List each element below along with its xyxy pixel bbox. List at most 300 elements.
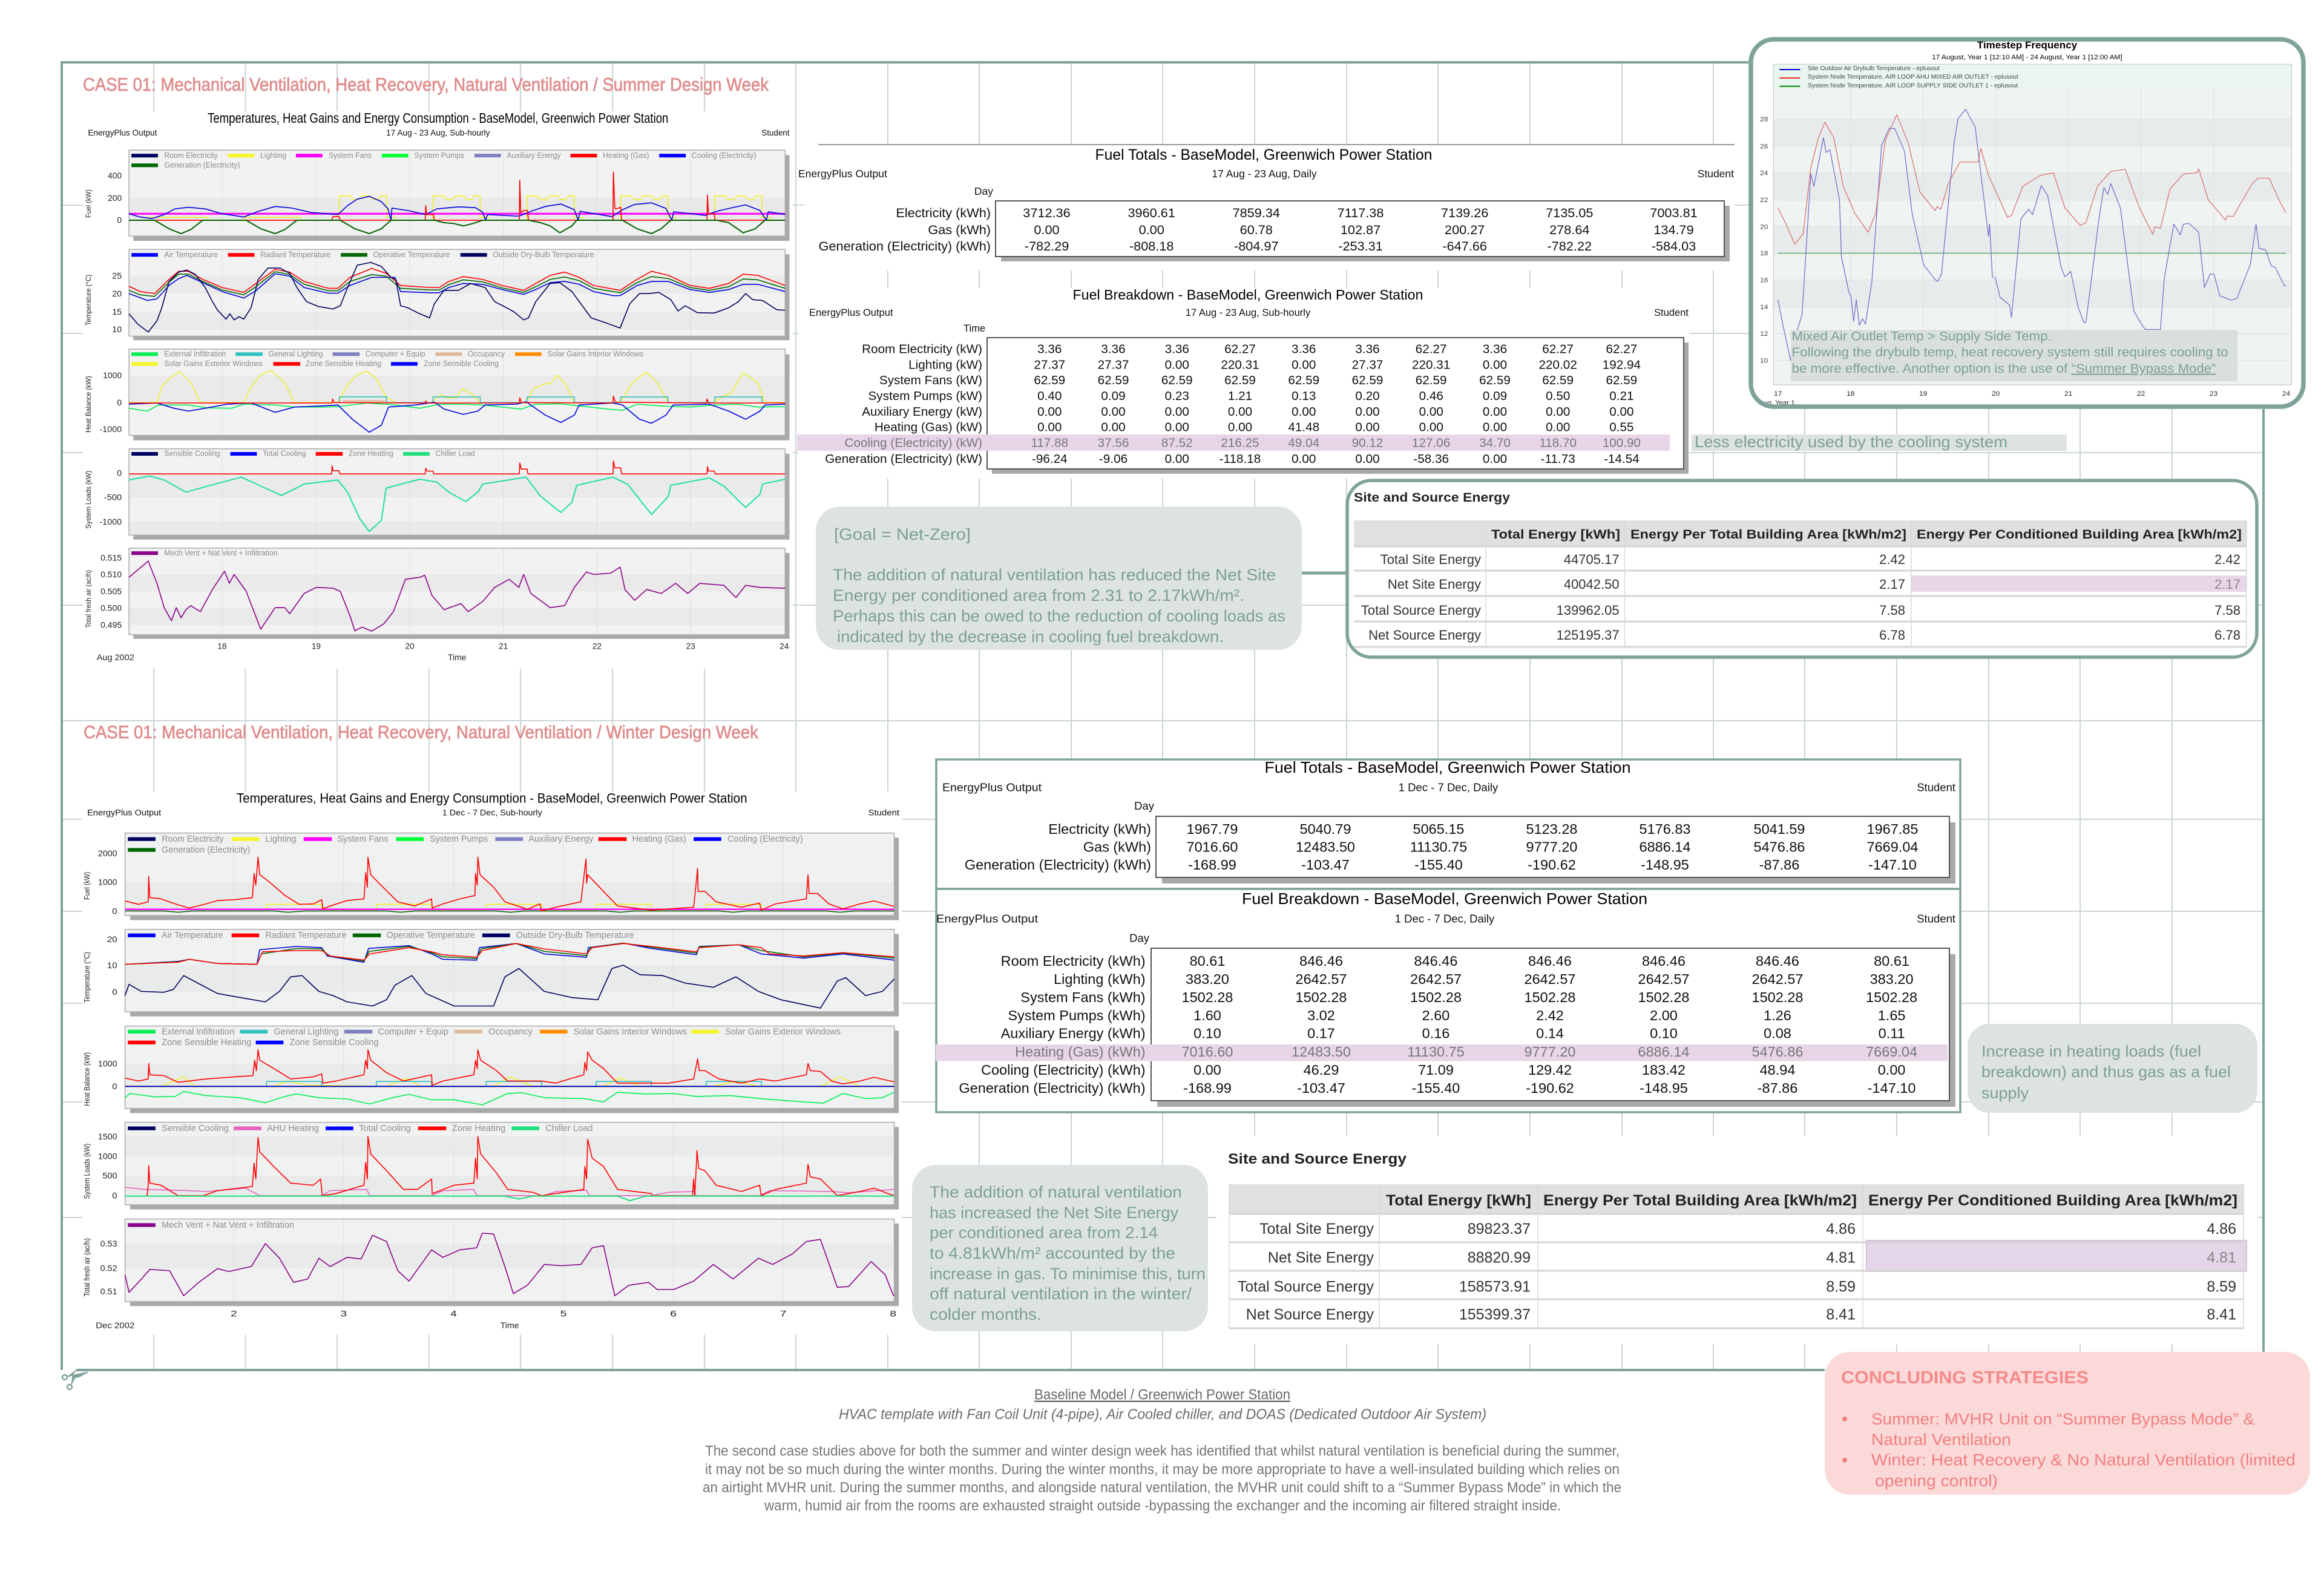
table: summer fuel breakdown: 0.23 <box>1165 389 1189 403</box>
axis labels: 1000 <box>98 877 117 887</box>
table: winter fuel breakdown: 846.46 <box>1414 953 1457 969</box>
text block: case study summary: it may not be so much during the winter months. During the winter months, it may be more appropriate to have a well-insulated building which relies on <box>705 1461 1620 1478</box>
table: summer fuel breakdown: -11.73 <box>1541 452 1575 466</box>
table: summer fuel breakdown: 0.21 <box>1609 389 1634 403</box>
table: summer fuel breakdown: 3.36 <box>1292 342 1316 356</box>
axis labels: 1000 <box>103 371 122 381</box>
table: winter fuel breakdown: 3.02 <box>1307 1008 1335 1023</box>
table: winter fuel breakdown: -190.62 <box>1526 1080 1574 1096</box>
callout: concluding strategies <box>1825 1352 2310 1495</box>
table: winter fuel breakdown: -147.10 <box>1868 1080 1915 1096</box>
panel: temperature: Air Temperature <box>162 930 223 940</box>
table: summer fuel breakdown: 0.00 <box>1165 452 1189 466</box>
panel: temperature: Air Temperature <box>164 250 218 259</box>
table: winter fuel breakdown: 846.46 <box>1528 953 1572 969</box>
table: winter fuel breakdown: 1.60 <box>1193 1008 1221 1023</box>
panel: temperature <box>125 929 899 1017</box>
table: summer site and source energy: Net Site Energy <box>1388 577 1481 592</box>
table: summer fuel breakdown: 34.70 <box>1479 436 1511 450</box>
table: summer fuel breakdown: 0.00 <box>1609 405 1634 419</box>
table: summer fuel breakdown: 0.00 <box>1355 421 1380 434</box>
chart meta labels: EnergyPlus Output <box>88 128 157 138</box>
axis labels: 0.500 <box>100 604 122 613</box>
table: summer fuel totals <box>798 145 1735 270</box>
table: winter fuel breakdown: System Fans (kWh) <box>1020 989 1146 1005</box>
text block: case study summary: The second case studies above for both the summer and winter design week has identified that whilst natural ventilation is beneficial during the summer, <box>705 1443 1620 1460</box>
axis labels: System Loads (kW) <box>85 471 93 529</box>
table: summer fuel breakdown: 3.36 <box>1165 342 1189 356</box>
axis labels: 14 <box>1760 303 1768 310</box>
table: summer fuel breakdown: 62.27 <box>1224 342 1256 356</box>
axis labels: 20 <box>1992 390 2000 398</box>
table: winter fuel breakdown: 71.09 <box>1418 1062 1454 1078</box>
table: summer fuel breakdown: 0.00 <box>1483 405 1507 419</box>
table: summer fuel breakdown: Lighting (kW) <box>908 358 982 372</box>
table: winter fuel breakdown: 80.61 <box>1874 953 1909 969</box>
axis labels: 18 <box>1846 390 1854 398</box>
axis labels: 25 <box>112 272 122 281</box>
axis labels: 22 <box>2137 390 2145 398</box>
table: summer fuel breakdown: 0.09 <box>1101 389 1126 403</box>
table: winter fuel totals: -155.40 <box>1414 857 1463 873</box>
table: summer fuel breakdown: Heating (Gas) (kW) <box>875 421 982 434</box>
panel: system loads: AHU Heating <box>267 1123 319 1133</box>
table: summer fuel breakdown: Time <box>963 323 985 334</box>
plot area: System Node Temperature, AIR LOOP AHU MIXED AIR OUTLET - eplusout <box>1808 73 2018 80</box>
table: summer fuel breakdown: 62.27 <box>1542 342 1574 356</box>
table: summer fuel breakdown: 0.00 <box>1292 452 1316 466</box>
table: winter site and source energy: 4.81 <box>1826 1249 1856 1266</box>
table: summer fuel totals: -808.18 <box>1129 238 1173 254</box>
table: summer fuel breakdown: 62.59 <box>1098 373 1129 387</box>
table: winter fuel breakdown: 1502.28 <box>1296 989 1347 1005</box>
axis labels: Aug, Year 1 <box>1759 399 1795 406</box>
table: winter fuel breakdown: System Pumps (kWh) <box>1008 1008 1146 1023</box>
table: summer fuel breakdown: 0.00 <box>1037 405 1062 419</box>
callout: less electricity: Less electricity used by the cooling system <box>1695 433 2007 451</box>
table: summer fuel breakdown: 41.48 <box>1288 421 1319 434</box>
table: winter fuel breakdown: 6886.14 <box>1638 1044 1689 1060</box>
table: winter fuel breakdown: Auxiliary Energy (kWh) <box>1001 1025 1146 1041</box>
page frame <box>62 62 2263 1370</box>
panel: temperature: Radiant Temperature <box>260 250 331 259</box>
table: winter fuel totals: 7669.04 <box>1867 839 1918 854</box>
table: summer site and source energy: 2.17 <box>1879 577 1905 592</box>
table: winter fuel totals: 5065.15 <box>1413 821 1464 837</box>
table: winter fuel breakdown: 2642.57 <box>1410 971 1462 987</box>
table: summer fuel totals: 278.64 <box>1549 222 1589 237</box>
table: summer fuel totals: -782.29 <box>1025 238 1069 254</box>
table: winter fuel breakdown: Generation (Electricity) (kWh) <box>959 1080 1146 1096</box>
chart meta labels: EnergyPlus Output <box>87 808 162 818</box>
table: winter site and source energy: Energy Per Conditioned Building Area [kWh/m2] <box>1868 1192 2237 1209</box>
table: summer fuel breakdown: 0.00 <box>1355 405 1380 419</box>
callout: mixed air outlet note: be more effective. Another option is the use of <box>1791 362 2068 376</box>
plot area: System Node Temperature, AIR LOOP SUPPLY SIDE OUTLET 1 - eplusout <box>1808 82 2018 89</box>
axis labels: 19 <box>312 642 321 651</box>
axis labels <box>85 171 789 663</box>
text block: case study summary <box>703 1443 1621 1514</box>
table: summer fuel breakdown: 1.21 <box>1228 389 1252 403</box>
table: summer fuel breakdown: 0.00 <box>1292 358 1316 372</box>
table: summer fuel breakdown: -96.24 <box>1032 452 1068 466</box>
table: winter fuel breakdown: 9777.20 <box>1525 1044 1575 1060</box>
table: summer fuel breakdown: 37.56 <box>1098 436 1129 450</box>
table: summer fuel breakdown: 0.50 <box>1546 389 1570 403</box>
table: winter fuel totals: Gas (kWh) <box>1083 839 1151 854</box>
axis labels: -1000 <box>100 425 122 434</box>
panel: heat balance <box>129 349 789 441</box>
axis labels: 21 <box>499 642 508 651</box>
table: summer fuel totals: 102.87 <box>1341 222 1380 237</box>
panel: fuel: Cooling (Electricity) <box>727 834 803 844</box>
axis labels: Fuel (kW) <box>85 189 93 218</box>
chart: summer temperatures, heat gains and energy consumption <box>83 111 793 669</box>
table: summer fuel totals: 134.79 <box>1653 222 1694 237</box>
table: winter fuel breakdown: 846.46 <box>1756 953 1799 969</box>
panel: heat balance: Computer + Equip <box>378 1026 448 1037</box>
panel: heat balance: Occupancy <box>468 349 505 358</box>
axis labels: 20 <box>112 289 122 298</box>
table: winter fuel breakdown: 0.14 <box>1536 1025 1564 1041</box>
table: winter fuel totals: 5123.28 <box>1526 821 1577 837</box>
table: summer fuel totals: 7135.05 <box>1546 205 1594 220</box>
table: winter site and source energy: 8.41 <box>1826 1306 1856 1323</box>
table: summer fuel breakdown: 0.55 <box>1609 421 1634 434</box>
panel: fuel: Lighting <box>260 151 286 160</box>
table: summer fuel breakdown: 0.00 <box>1228 405 1252 419</box>
axis labels: 21 <box>2064 390 2072 398</box>
table: summer fuel breakdown: 62.59 <box>1479 373 1511 387</box>
chart: timestep frequency panel <box>1751 39 2303 407</box>
table: summer fuel totals: Electricity (kWh) <box>896 205 991 220</box>
table: summer fuel breakdown: 0.00 <box>1165 358 1189 372</box>
axis labels: Temperature (°C) <box>84 952 91 1003</box>
axis labels: 200 <box>108 194 122 203</box>
table: winter site and source energy: Site and Source Energy <box>1228 1151 1407 1167</box>
table: winter fuel breakdown: 129.42 <box>1528 1062 1572 1078</box>
table: summer fuel breakdown: 87.52 <box>1161 436 1193 450</box>
table: summer fuel breakdown: System Pumps (kW) <box>868 389 982 403</box>
divider line above fuel totals <box>818 144 1735 145</box>
table: summer fuel breakdown: 62.59 <box>1288 373 1319 387</box>
panel: fuel <box>125 833 899 920</box>
text block: project caption: Baseline Model / Greenwich Power Station <box>1034 1387 1290 1403</box>
callout: winter natural ventilation note: to 4.81kWh/m² accounted by the <box>930 1244 1175 1262</box>
callout: mixed air outlet note <box>1791 329 2237 381</box>
table: winter fuel breakdown: 0.17 <box>1307 1025 1335 1041</box>
table: summer fuel breakdown: 0.46 <box>1419 389 1443 403</box>
table: winter fuel breakdown: Lighting (kWh) <box>1054 971 1146 987</box>
axis labels: Total fresh air (ac/h) <box>84 1238 91 1297</box>
table: summer fuel breakdown: 220.02 <box>1539 358 1577 372</box>
table: winter fuel breakdown: 12483.50 <box>1292 1044 1351 1060</box>
table: winter fuel totals: 12483.50 <box>1296 839 1355 854</box>
table: winter fuel totals: 5176.83 <box>1640 821 1690 837</box>
table: summer fuel totals: 7859.34 <box>1233 205 1280 220</box>
table: summer site and source energy: 2.42 <box>1879 552 1905 567</box>
table: winter fuel breakdown: Cooling (Electricity) (kWh) <box>981 1062 1146 1078</box>
table: summer site and source energy: 2.42 <box>2214 552 2240 567</box>
connector: goal note to site table <box>1302 571 1346 575</box>
table: summer fuel breakdown: 3.36 <box>1037 342 1062 356</box>
table: winter fuel breakdown: 1.26 <box>1764 1008 1791 1023</box>
panel: heat balance: Solar Gains Interior Windows <box>547 349 643 358</box>
table: winter site and source energy: Total Energy [kWh] <box>1386 1192 1531 1209</box>
axis labels: 1500 <box>98 1132 117 1141</box>
axis labels: 18 <box>1760 249 1768 257</box>
chart meta labels: Student <box>868 808 899 818</box>
panel: heat balance: Zone Sensible Cooling <box>424 359 499 368</box>
table: summer site and source energy: Site and Source Energy <box>1354 491 1510 505</box>
table: winter fuel totals <box>936 758 1960 889</box>
panel: fuel: Heating (Gas) <box>603 151 649 160</box>
axis labels <box>84 849 896 1330</box>
table: winter fuel breakdown: 5476.86 <box>1752 1044 1803 1060</box>
panel: temperature: Operative Temperature <box>373 250 450 259</box>
axis labels: 0.53 <box>100 1239 117 1248</box>
axis labels: -1000 <box>100 517 122 527</box>
table: summer fuel totals: 0.00 <box>1034 222 1060 237</box>
table: winter fuel breakdown: -103.47 <box>1297 1080 1345 1096</box>
callout: concluding strategies: CONCLUDING STRATEGIES <box>1841 1368 2089 1388</box>
table: winter fuel breakdown: Heating (Gas) (kWh) <box>1015 1044 1146 1060</box>
axis labels: 0 <box>117 398 122 408</box>
chart meta labels: Student <box>761 128 790 138</box>
table: summer fuel breakdown: -9.06 <box>1099 452 1128 466</box>
table: winter site and source energy: 8.41 <box>2207 1306 2236 1323</box>
panel: heat balance: External Infiltration <box>162 1026 234 1037</box>
table: summer fuel totals: EnergyPlus Output <box>798 168 887 180</box>
table: winter fuel breakdown: 2642.57 <box>1296 971 1347 987</box>
axis labels: 0 <box>112 1082 117 1092</box>
table: winter fuel breakdown: 0.10 <box>1193 1025 1221 1041</box>
table: summer fuel totals: Fuel Totals - BaseModel, Greenwich Power Station <box>1095 146 1432 163</box>
table: summer fuel breakdown <box>797 287 1689 479</box>
table: winter fuel totals: EnergyPlus Output <box>942 781 1042 794</box>
table: summer site and source energy: 125195.37 <box>1557 628 1620 643</box>
table: winter fuel breakdown: -168.99 <box>1183 1080 1232 1096</box>
chart title: Temperatures, Heat Gains and Energy Consumption - BaseModel, Greenwich Power Station <box>237 790 747 805</box>
axis labels: 0.515 <box>100 554 122 563</box>
table: winter fuel totals: 7016.60 <box>1187 839 1238 854</box>
table: winter site and source energy: Total Site Energy <box>1259 1221 1374 1237</box>
chart: winter temperatures, heat gains and energy consumption <box>82 790 902 1335</box>
table: summer fuel breakdown: -118.18 <box>1219 452 1261 466</box>
table: summer fuel breakdown: 0.00 <box>1292 405 1316 419</box>
table: summer fuel breakdown: 0.00 <box>1101 405 1126 419</box>
table: summer fuel breakdown: 62.59 <box>1034 373 1065 387</box>
callout: winter natural ventilation note: increase in gas. To minimise this, turn <box>930 1265 1206 1283</box>
table: winter fuel breakdown: 0.16 <box>1422 1025 1449 1041</box>
panel: system loads: Total Cooling <box>359 1123 411 1133</box>
table: winter fuel totals: -148.95 <box>1641 857 1689 873</box>
callout: mixed air outlet note: Mixed Air Outlet Temp > Supply Side Temp. <box>1791 329 2052 343</box>
panel: heat balance: General Lighting <box>274 1026 339 1037</box>
axis labels: 10 <box>107 960 117 970</box>
table: summer fuel breakdown: 220.31 <box>1412 358 1450 372</box>
panel: fuel: System Pumps <box>414 151 464 160</box>
table: summer fuel totals: Student <box>1698 168 1734 180</box>
panel: total fresh air: Mech Vent + Nat Vent + Infiltration <box>164 548 278 557</box>
axis labels: Time <box>448 653 466 663</box>
table: winter site and source energy: 158573.91 <box>1459 1278 1531 1295</box>
table: summer fuel breakdown: EnergyPlus Output <box>809 307 893 318</box>
heading: winter design week: CASE 01: Mechanical Ventilation, Heat Recovery, Natural Ventilation / Winter Design Week <box>84 723 759 742</box>
table: summer fuel totals: 7117.38 <box>1338 205 1384 220</box>
panel: heat balance: Zone Sensible Heating <box>306 359 381 368</box>
panel: heat balance: Computer + Equip <box>366 349 425 358</box>
axis labels: Time <box>501 1320 519 1330</box>
table: winter fuel breakdown: 1502.28 <box>1182 989 1233 1005</box>
axis labels: 2000 <box>98 849 117 859</box>
axis labels: 10 <box>1760 357 1768 364</box>
chart meta labels <box>88 128 790 138</box>
table: summer fuel breakdown: System Fans (kW) <box>879 373 982 387</box>
table: summer fuel totals: 0.00 <box>1139 222 1164 237</box>
table: summer fuel breakdown: 220.31 <box>1221 358 1259 372</box>
table: summer fuel breakdown: 100.90 <box>1603 436 1641 450</box>
table: summer site and source energy: Energy Per Total Building Area [kWh/m2] <box>1630 527 1906 542</box>
table: summer fuel breakdown: 3.36 <box>1101 342 1126 356</box>
axis labels: 23 <box>686 642 695 651</box>
panel: heat balance: Occupancy <box>488 1026 533 1037</box>
panel: fuel: Room Electricity <box>164 151 218 160</box>
chart subtitle: 17 August, Year 1 [12:10 AM] - 24 August, Year 1 [12:00 AM] <box>1932 53 2122 61</box>
table: summer fuel breakdown: 0.00 <box>1483 358 1507 372</box>
callout: goal net-zero: The addition of natural ventilation has reduced the Net Site <box>833 566 1276 584</box>
table: summer fuel breakdown: 27.37 <box>1098 358 1129 372</box>
table: winter site and source energy: 4.86 <box>2207 1221 2236 1237</box>
table: winter fuel breakdown: 1502.28 <box>1752 989 1803 1005</box>
table: winter fuel totals: -147.10 <box>1868 857 1917 873</box>
table: winter fuel breakdown: 7669.04 <box>1866 1044 1917 1060</box>
panel: heat balance: Zone Sensible Heating <box>162 1037 251 1047</box>
axis labels: Temperature (°C) <box>85 275 93 326</box>
table: summer site and source energy: Total Source Energy <box>1361 603 1481 618</box>
table: summer fuel breakdown: Fuel Breakdown - BaseModel, Greenwich Power Station <box>1072 287 1423 303</box>
table: summer site and source energy: 40042.50 <box>1564 577 1620 592</box>
chart meta labels <box>87 808 899 818</box>
table: summer fuel breakdown: 62.59 <box>1224 373 1256 387</box>
table: summer fuel breakdown: 62.59 <box>1352 373 1383 387</box>
table: winter fuel breakdown: 7016.60 <box>1182 1044 1233 1060</box>
table: summer site and source energy: Energy Per Conditioned Building Area [kWh/m2] <box>1917 527 2242 542</box>
text block: project caption <box>839 1387 1486 1423</box>
table: summer fuel breakdown: 0.00 <box>1546 421 1570 434</box>
table: winter fuel breakdown <box>936 889 1960 1112</box>
table: winter site and source energy: Energy Per Total Building Area [kWh/m2] <box>1543 1192 1857 1209</box>
table: summer fuel breakdown: 62.59 <box>1606 373 1637 387</box>
table: summer site and source energy: 7.58 <box>1879 603 1905 618</box>
table: winter fuel breakdown: 2642.57 <box>1525 971 1575 987</box>
table: winter fuel totals: Student <box>1917 781 1955 794</box>
table: winter fuel breakdown: -148.95 <box>1640 1080 1688 1096</box>
axis labels: 500 <box>102 1171 117 1181</box>
table: summer fuel breakdown: -14.54 <box>1604 452 1640 466</box>
table: summer fuel totals: 3960.61 <box>1128 205 1175 220</box>
table: winter fuel breakdown: 846.46 <box>1299 953 1343 969</box>
table: winter site and source energy: 88820.99 <box>1468 1249 1531 1266</box>
table: summer fuel breakdown: Room Electricity (kW) <box>862 342 982 356</box>
table: summer fuel breakdown: 3.36 <box>1483 342 1507 356</box>
callout: goal net-zero: [Goal = Net-Zero] <box>834 525 971 543</box>
panel: heat balance: Zone Sensible Cooling <box>290 1037 379 1047</box>
callout: concluding strategies: Summer: MVHR Unit on “Summer Bypass Mode” & <box>1871 1410 2254 1428</box>
table: winter site and source energy: Total Source Energy <box>1238 1278 1374 1295</box>
table: winter fuel breakdown: 48.94 <box>1760 1062 1795 1078</box>
table: winter fuel breakdown: 383.20 <box>1186 971 1229 987</box>
table: summer fuel breakdown: 62.59 <box>1161 373 1193 387</box>
table: summer fuel breakdown: 192.94 <box>1603 358 1641 372</box>
table: winter fuel breakdown: 183.42 <box>1642 1062 1686 1078</box>
axis labels: 0.51 <box>100 1287 117 1297</box>
panel: temperature: Operative Temperature <box>387 930 475 940</box>
axis labels: 19 <box>1919 390 1927 398</box>
panel: system loads: Chiller Load <box>545 1123 592 1133</box>
axis labels: 24 <box>2282 390 2290 398</box>
table: summer fuel totals: 7003.81 <box>1650 205 1698 220</box>
table: winter fuel breakdown: 2.60 <box>1422 1008 1449 1023</box>
panel: fuel <box>129 150 789 241</box>
table: summer fuel breakdown: -58.36 <box>1413 452 1449 466</box>
table: summer fuel totals: 200.27 <box>1445 222 1485 237</box>
table: summer site and source energy: 6.78 <box>1879 628 1905 643</box>
table: summer fuel breakdown: Generation (Electricity) (kW) <box>825 452 982 466</box>
table: winter fuel breakdown: 2.00 <box>1650 1008 1678 1023</box>
table: winter fuel breakdown: 0.08 <box>1764 1025 1791 1041</box>
axis labels: 400 <box>108 171 122 181</box>
axis labels: Total fresh air (ac/h) <box>85 570 93 628</box>
table: summer fuel totals: 60.78 <box>1240 222 1273 237</box>
table: winter site and source energy <box>1216 1136 2257 1344</box>
table: summer site and source energy: 44705.17 <box>1564 552 1620 567</box>
panel: fuel: Room Electricity <box>162 834 224 844</box>
table: summer fuel totals: -804.97 <box>1234 238 1279 254</box>
table: summer fuel breakdown: 118.70 <box>1539 436 1577 450</box>
table: winter fuel breakdown: Room Electricity (kWh) <box>1001 953 1146 969</box>
table: winter fuel breakdown: 1502.28 <box>1410 989 1462 1005</box>
table: winter fuel breakdown: 0.00 <box>1193 1062 1221 1078</box>
table: winter fuel totals: Generation (Electricity) (kWh) <box>965 857 1151 873</box>
axis labels: Fuel (kW) <box>84 872 91 900</box>
axis labels: -500 <box>104 493 122 502</box>
callout: concluding strategies: Winter: Heat Recovery & No Natural Ventilation (limited <box>1871 1451 2296 1469</box>
callout: goal net-zero: indicated by the decrease in cooling fuel breakdown. <box>837 628 1224 646</box>
table: winter fuel breakdown: Student <box>1917 913 1955 925</box>
table: summer site and source energy: 6.78 <box>2214 628 2240 643</box>
table: summer fuel breakdown: 0.00 <box>1101 421 1126 434</box>
table: summer fuel totals: 7139.26 <box>1441 205 1488 220</box>
table: winter fuel totals: 6886.14 <box>1640 839 1690 854</box>
heading: summer design week: CASE 01: Mechanical Ventilation, Heat Recovery, Natural Ventilation / Summer Design Week <box>83 74 769 95</box>
callout: heating loads increase <box>1968 1024 2257 1113</box>
plot area: Site Outdoor Air Drybulb Temperature - eplusout <box>1808 65 1940 71</box>
table: summer fuel breakdown: 90.12 <box>1352 436 1383 450</box>
table: summer fuel totals: -647.66 <box>1442 238 1487 254</box>
table: winter fuel breakdown: 846.46 <box>1642 953 1686 969</box>
axis labels: 1000 <box>98 1152 117 1161</box>
table: winter fuel totals: 1967.79 <box>1187 821 1238 837</box>
table: summer site and source energy: Total Site Energy <box>1380 552 1481 567</box>
axis labels: 0.505 <box>100 587 122 597</box>
table: summer fuel breakdown: Student <box>1654 307 1689 318</box>
table: summer fuel totals: Generation (Electricity) (kWh) <box>819 238 991 254</box>
table: winter fuel breakdown: 0.00 <box>1878 1062 1905 1078</box>
axis labels: 23 <box>2210 390 2217 398</box>
panel: system loads: Sensible Cooling <box>164 449 220 457</box>
panel: fuel: Generation (Electricity) <box>162 845 250 854</box>
